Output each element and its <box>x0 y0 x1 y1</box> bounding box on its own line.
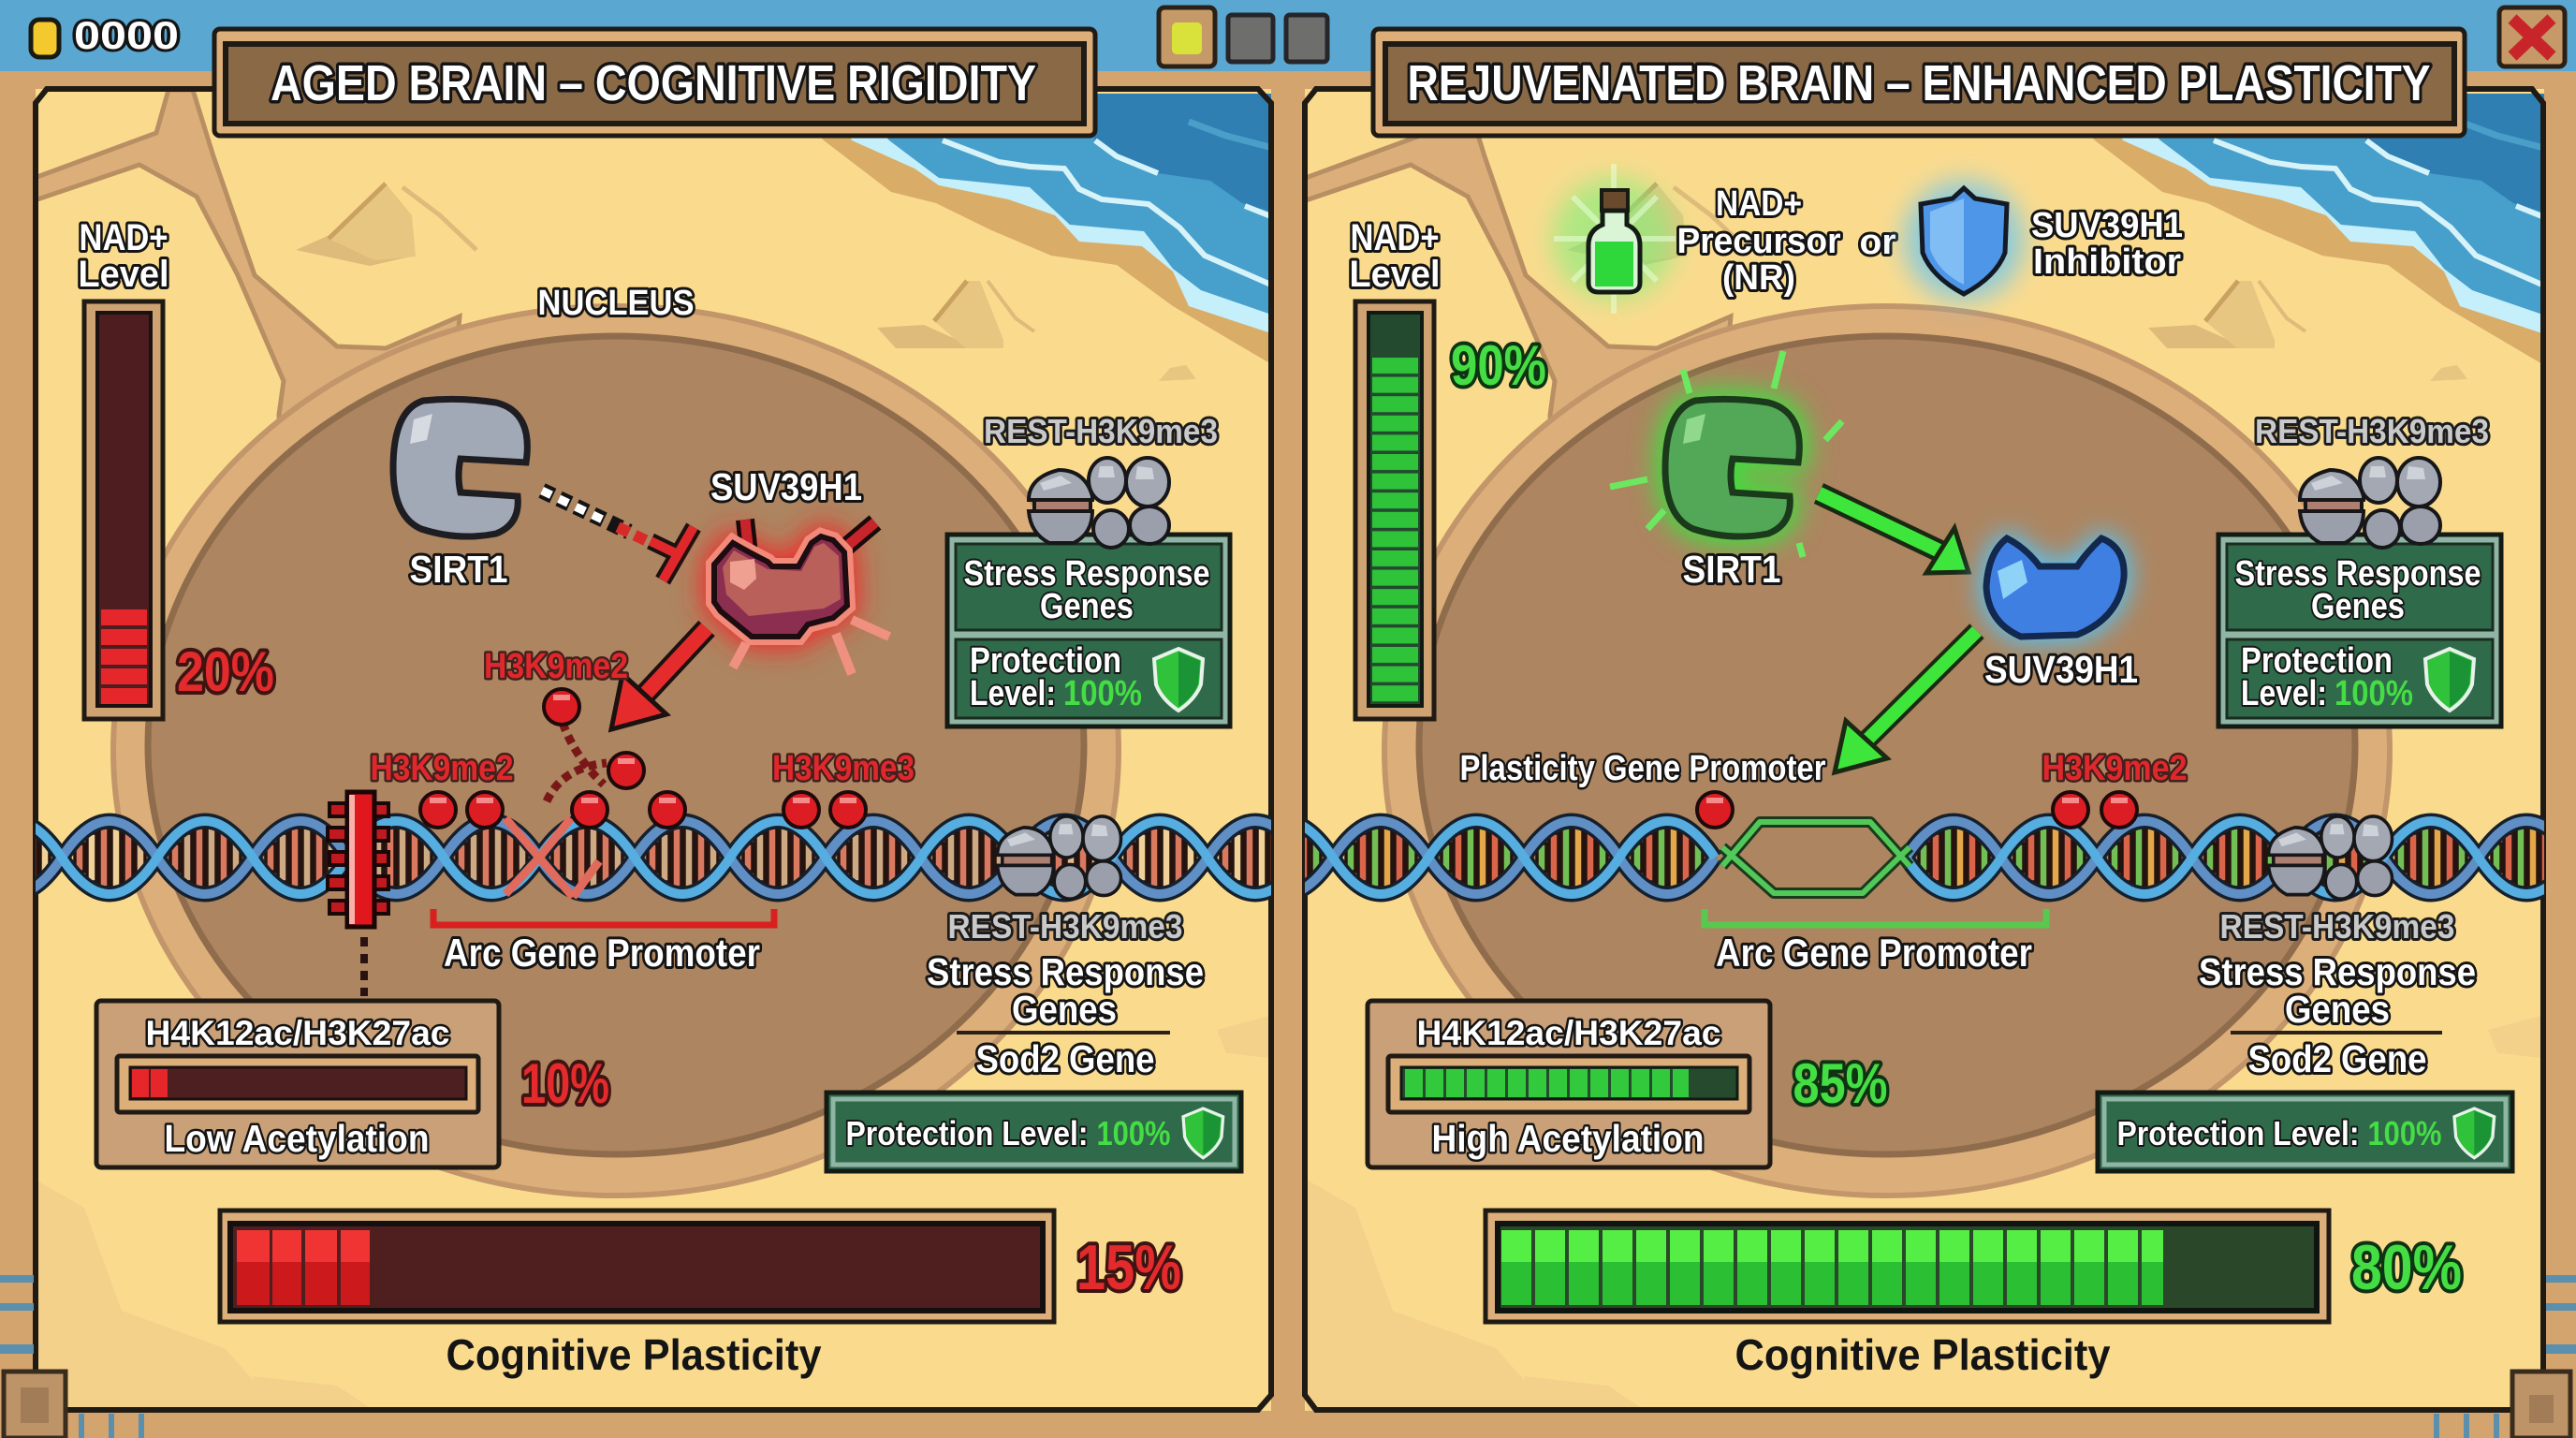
Sod2 label: Sod2 Gene <box>975 1037 1155 1080</box>
acetylation value: rejuvenated: 85% <box>1793 1052 1887 1115</box>
REST label upper: aged: REST-H3K9me3 <box>984 412 1218 450</box>
genes label: Genes <box>1012 988 1117 1031</box>
label: H3K9me3 on DNA: H3K9me3 <box>772 749 915 788</box>
plasticity label: aged: Cognitive Plasticity <box>446 1330 822 1379</box>
acetylation card: aged <box>96 1001 499 1167</box>
green arrow: SUV39H1 to promoter <box>1835 631 1977 772</box>
NAD+ gauge: aged <box>79 217 168 719</box>
label: SUV39H1 inhibitor <box>2031 206 2183 282</box>
label: SIRT1 rejuvenated: SIRT1 <box>1683 548 1780 591</box>
green arrow: SIRT1 to SUV39H1 <box>1819 493 1969 573</box>
REST label: REST-H3K9me3 <box>2220 907 2454 946</box>
protection card lower: aged: Protection Level: <box>846 1114 1088 1152</box>
gauge frame <box>1355 301 1434 719</box>
window buttons <box>1159 7 1327 66</box>
label: or: or <box>1859 223 1896 262</box>
label: NAD+ precursor: Precursor <box>1677 222 1841 261</box>
inhibition dashed arrow <box>542 491 694 580</box>
stress response card upper: aged: Level: <box>970 674 1056 713</box>
protection card lower: rejuvenated <box>2098 1093 2512 1171</box>
stress response card upper: aged: Stress Response <box>964 554 1209 594</box>
panel border: aged <box>36 89 1271 1410</box>
stress response card upper: rejuvenated: Genes <box>2311 587 2405 626</box>
acetylation card: aged: H4K12ac/H3K27ac <box>146 1014 449 1052</box>
protection card lower: rejuvenated: 100% <box>2368 1114 2441 1152</box>
NAD+ value: rejuvenated: 90% <box>1451 334 1546 397</box>
label: NAD+ precursor: (NR) <box>1722 258 1795 298</box>
stress response card upper: aged <box>947 535 1230 726</box>
beach and nucleus scene: rejuvenated <box>1299 84 2554 1414</box>
stress response card upper: aged: Genes <box>1040 587 1134 626</box>
cognitive plasticity bar: rejuvenated <box>1486 1211 2329 1322</box>
panel border: rejuvenated <box>1305 89 2543 1410</box>
coin counter <box>31 13 179 57</box>
rail decorations <box>0 1275 2576 1438</box>
title: rejuvenated brain <box>1373 29 2465 136</box>
detached methyl groups <box>544 689 644 801</box>
stress response card upper: rejuvenated: Protection <box>2241 641 2393 681</box>
opened promoter bubble <box>1722 822 1910 893</box>
protection card lower: aged <box>827 1093 1241 1171</box>
label: NAD+ precursor <box>1677 184 1841 298</box>
acetylation card: aged: Low Acetylation <box>165 1117 429 1160</box>
title: aged brain <box>214 29 1095 136</box>
Arc promoter bracket: rejuvenated <box>1705 909 2046 925</box>
label: SUV39H1 rejuvenated: SUV39H1 <box>1984 648 2138 691</box>
coin counter: 0000 <box>74 13 179 57</box>
stress response card upper: rejuvenated: Stress Response <box>2235 554 2481 594</box>
stress response card upper: rejuvenated: Level: <box>2241 674 2327 713</box>
divider <box>2231 1031 2442 1034</box>
gauge trough <box>97 313 151 706</box>
corner button left <box>4 1372 66 1438</box>
stress response card upper: aged: 100% <box>1063 674 1142 713</box>
base pair rungs <box>36 829 1271 886</box>
NAD+ value: aged: 20% <box>177 640 274 703</box>
NAD+ gauge: rejuvenated <box>1350 217 1440 719</box>
label: NAD+ precursor: NAD+ <box>1716 184 1802 224</box>
label: plasticity gene promoter: Plasticity Gene Promoter <box>1460 749 1826 788</box>
divider <box>957 1031 1170 1034</box>
acetylation card: rejuvenated: H4K12ac/H3K27ac <box>1417 1014 1720 1052</box>
Arc promoter bracket: aged <box>433 909 774 925</box>
SIRT1 enzyme: active green <box>1610 351 1842 557</box>
plasticity label: rejuvenated: Cognitive Plasticity <box>1735 1330 2111 1379</box>
label: nucleus: NUCLEUS <box>537 284 695 323</box>
title: aged brain: AGED BRAIN – COGNITIVE RIGIDITY <box>271 55 1036 111</box>
histone repressor bar <box>328 792 388 996</box>
Sod2 label: Sod2 Gene <box>2248 1037 2426 1080</box>
stress response text group: rejuvenated <box>2199 907 2476 1080</box>
protection card lower: rejuvenated: Protection Level: <box>2117 1114 2359 1152</box>
DNA helix: aged <box>0 818 1303 897</box>
plasticity value: aged: 15% <box>1076 1232 1181 1303</box>
protection card lower: aged: 100% <box>1097 1114 1170 1152</box>
label: Arc gene promoter rejuvenated: Arc Gene Promoter <box>1716 931 2032 975</box>
panel: rejuvenated brain <box>1299 84 2554 1414</box>
nucleosome above box: aged <box>1029 458 1169 548</box>
NAD+ label: NAD+ <box>79 217 168 258</box>
stress response card upper: rejuvenated <box>2218 535 2501 726</box>
Level label: Level <box>1350 254 1440 295</box>
SUV39H1 inhibitor shield <box>1904 181 2024 301</box>
label: SIRT1 aged: SIRT1 <box>410 548 507 591</box>
label: SUV39H1 inhibitor: SUV39H1 <box>2031 206 2183 245</box>
gauge fill 90 percent <box>1372 358 1418 704</box>
methyl marks on DNA: rejuvenated <box>1697 792 2137 828</box>
nucleosome on DNA: rejuvenated <box>2269 816 2393 899</box>
nucleosome above box: rejuvenated <box>2300 458 2440 548</box>
nucleosome on DNA: aged <box>998 816 1121 899</box>
SUV39H1 enzyme: inhibited blue <box>1986 538 2124 637</box>
SIRT1 enzyme: inactive grey <box>393 399 527 536</box>
genes label: Genes <box>2285 988 2390 1031</box>
label: H3K9me2 floating: H3K9me2 <box>484 647 628 686</box>
strands <box>1237 821 2574 894</box>
gauge fill 20 percent <box>101 609 147 704</box>
methyl marks on DNA: aged <box>420 792 866 828</box>
acetylation value: aged: 10% <box>521 1052 609 1115</box>
beach and nucleus scene: aged <box>28 84 1282 1414</box>
stress response label: Stress Response <box>927 950 1204 993</box>
corner button right <box>2512 1372 2570 1438</box>
stress response text group: aged <box>927 907 1204 1080</box>
label: H3K9me2 rejuvenated: H3K9me2 <box>2042 749 2187 788</box>
acetylation card: rejuvenated: High Acetylation <box>1432 1117 1704 1160</box>
label: Arc gene promoter aged: Arc Gene Promoter <box>444 931 760 975</box>
stress response card upper: rejuvenated: 100% <box>2334 674 2413 713</box>
NAD precursor potion <box>1552 164 1676 314</box>
strands <box>0 818 1303 897</box>
Level label: Level <box>79 254 168 295</box>
NAD+ label: NAD+ <box>1350 217 1440 258</box>
label: SUV39H1 aged: SUV39H1 <box>710 465 862 508</box>
acetylation card: rejuvenated <box>1368 1001 1770 1167</box>
gauge frame <box>84 301 163 719</box>
cognitive plasticity bar: aged <box>220 1211 1054 1322</box>
stress response label: Stress Response <box>2199 950 2476 993</box>
base pair rungs <box>1305 829 2544 886</box>
REST label: REST-H3K9me3 <box>947 907 1183 946</box>
panel: aged brain <box>28 84 1282 1414</box>
plasticity value: rejuvenated: 80% <box>2351 1232 2462 1303</box>
REST label upper: rejuvenated: REST-H3K9me3 <box>2255 412 2489 450</box>
gauge trough <box>1368 313 1422 706</box>
close button <box>2499 7 2565 66</box>
stress response card upper: aged: Protection <box>970 641 1121 681</box>
label: SUV39H1 inhibitor: Inhibitor <box>2033 242 2181 282</box>
red activation arrow <box>611 628 707 729</box>
SUV39H1 enzyme: active red <box>714 520 889 674</box>
title: rejuvenated brain: REJUVENATED BRAIN – ENHANCED PLASTICITY <box>1408 55 2430 111</box>
label: H3K9me2 on DNA: H3K9me2 <box>371 749 513 788</box>
DNA helix: rejuvenated <box>1237 821 2574 894</box>
